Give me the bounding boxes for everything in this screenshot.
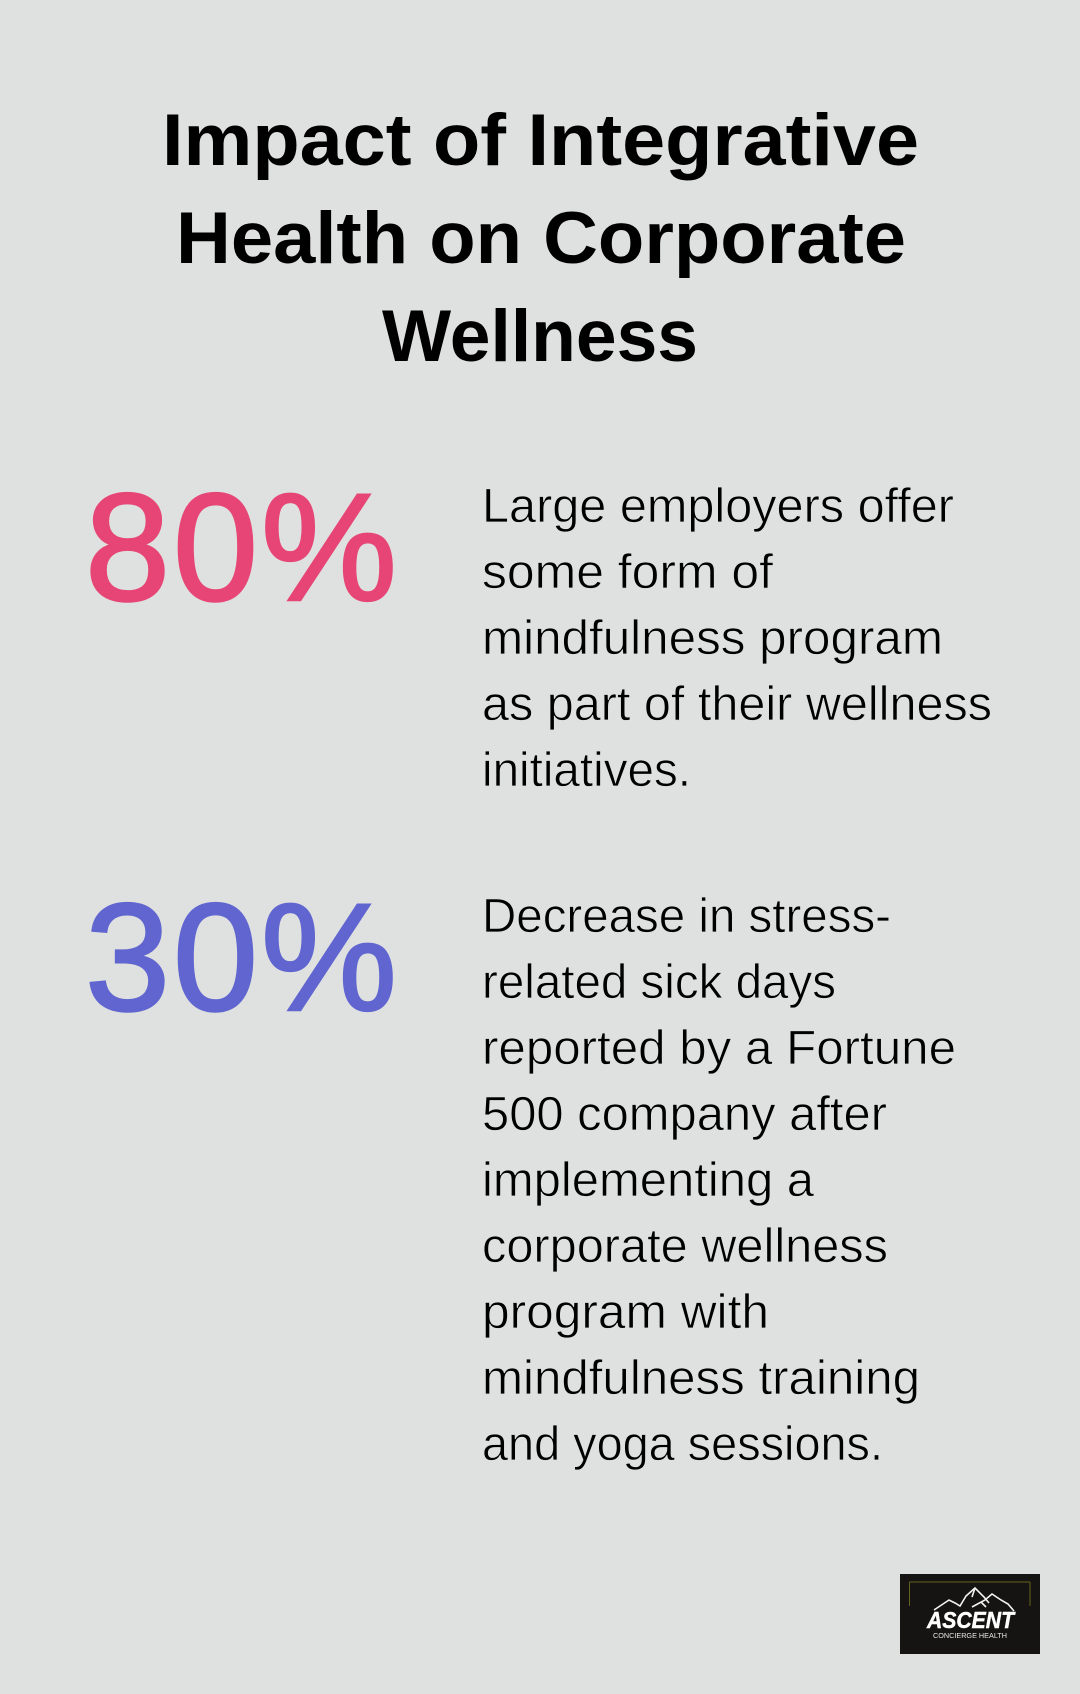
- title: [162, 100, 919, 377]
- text: sick days description: related sick days: [482, 956, 836, 1009]
- stat: 30%: 30%: [85, 872, 397, 1043]
- stat: 80%: 80%: [85, 462, 397, 633]
- text: mindfulness program description: [482, 480, 992, 797]
- text: sick days description: implementing a: [482, 1154, 814, 1207]
- title: Wellness: [382, 296, 698, 377]
- text: sick days description: [482, 890, 956, 1471]
- text: mindfulness program description: mindfulness program: [482, 612, 943, 665]
- text: mindfulness program description: initiatives.: [482, 744, 691, 797]
- text: mindfulness program description: as part of their wellness: [482, 678, 992, 731]
- icon: mountains: [934, 1588, 1014, 1611]
- text: mindfulness program description: some form of: [482, 546, 774, 599]
- title: Health on Corporate: [176, 198, 906, 279]
- text: sick days description: 500 company after: [482, 1088, 887, 1141]
- title: Impact of Integrative: [162, 100, 919, 181]
- text: sick days description: program with: [482, 1286, 769, 1339]
- logo: Ascent Concierge Health: [900, 1574, 1040, 1654]
- text: mindfulness program description: Large employers offer: [482, 480, 954, 533]
- logo: Ascent Concierge Health: CONCIERGE HEALTH: [933, 1633, 1007, 1640]
- logo: Ascent Concierge Health: ASCENT: [926, 1607, 1016, 1633]
- text: sick days description: Decrease in stress-: [482, 890, 891, 943]
- text: sick days description: corporate wellness: [482, 1220, 888, 1273]
- text: sick days description: reported by a Fortune: [482, 1022, 956, 1075]
- text: sick days description: and yoga sessions.: [482, 1418, 883, 1471]
- text: sick days description: mindfulness training: [482, 1352, 920, 1405]
